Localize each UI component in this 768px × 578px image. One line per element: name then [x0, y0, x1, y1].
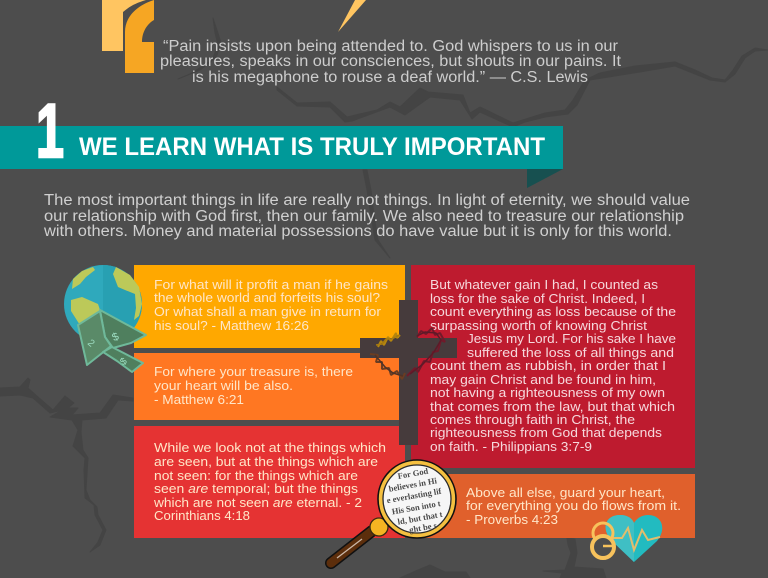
panel: Philippians 3:7-9: But whatever gain I had, I counted as: [430, 277, 659, 292]
icon: lightning bolt: [338, 0, 366, 32]
panel: 2 Corinthians 4:18: are seen, but at the things which are: [154, 454, 378, 469]
panel: Matthew 6:21: - Matthew 6:21: [154, 392, 244, 407]
lens text: believes in Hi: [388, 475, 438, 494]
panel: Philippians 3:7-9: comes through faith in Christ, the: [430, 412, 635, 427]
panel: Philippians 3:7-9: surpassing worth of knowing Christ: [430, 318, 647, 333]
section banner: [0, 89, 563, 188]
icon: globe with money: 2: [85, 338, 97, 350]
quote: pleasures, speaks in our consciences, but shouts in our pains. It: [160, 53, 622, 70]
lens text: ght be s: [408, 520, 438, 535]
panel: Matthew 6:21: For where your treasure is, there: [154, 364, 353, 379]
panel: Matthew 16:26: For what will it profit a man if he gains: [154, 277, 389, 292]
panel: Matthew 16:26: Or what shall a man give in return for: [154, 304, 382, 319]
intro paragraph: [43, 192, 690, 240]
intro paragraph: The most important things in life are really not things. In light of eternity, we should value: [44, 192, 690, 209]
icon: globe with money: $: [110, 331, 121, 344]
panel: 2 Corinthians 4:18: Corinthians 4:18: [154, 508, 250, 523]
panel: 2 Corinthians 4:18: seen are temporal; but the things: [154, 481, 359, 496]
crown of thorns: [370, 328, 445, 379]
panel: Proverbs 4:23: Above all else, guard your heart,: [466, 485, 665, 500]
panel: Matthew 16:26: his soul? - Matthew 16:26: [154, 318, 309, 333]
panel: Proverbs 4:23: for everything you do flows from it.: [466, 498, 681, 513]
icon: cross with crown of thorns: [360, 300, 457, 445]
panel: Philippians 3:7-9: count them as rubbish, in order that I: [430, 358, 666, 373]
icon: globe with money: $: [118, 356, 130, 368]
heading: WE LEARN WHAT IS TRULY IMPORTANT: [79, 133, 545, 161]
panel: Matthew 6:21: your heart will be also.: [154, 378, 293, 393]
intro paragraph: our relationship with God first, then our family. We also need to treasure our relationship: [44, 208, 684, 225]
icon: magnifying glass over Bible verse: [331, 460, 456, 563]
panel: Matthew 16:26: the whole world and forfeits his soul?: [154, 290, 380, 305]
panel: Proverbs 4:23: - Proverbs 4:23: [466, 512, 558, 527]
panel: Philippians 3:7-9: suffered the loss of all things and: [467, 345, 674, 360]
panel: 2 Corinthians 4:18: [134, 426, 405, 538]
icon: heart with lock and pulse: [592, 515, 662, 562]
panel: Philippians 3:7-9: that comes from the law, but that which: [430, 399, 675, 414]
quote: [160, 38, 622, 86]
panel: Matthew 16:26: [134, 265, 405, 348]
panel: Philippians 3:7-9: may gain Christ and be found in him,: [430, 372, 656, 387]
banknote: [103, 347, 143, 372]
panel: Philippians 3:7-9: Jesus my Lord. For his sake I have: [467, 331, 676, 346]
banknote: [78, 311, 111, 365]
icon: globe with money: [64, 265, 146, 372]
panel: Philippians 3:7-9: loss for the sake of Christ. Indeed, I: [430, 291, 645, 306]
lens text: e everlasting lif: [386, 486, 442, 505]
banknote: [100, 310, 146, 348]
panel: 2 Corinthians 4:18: which are not seen are eternal. - 2: [153, 495, 362, 510]
icon: quotation mark: [102, 0, 154, 73]
panel: Philippians 3:7-9: count everything as loss because of the: [430, 304, 676, 319]
lens text: ld, but that t: [397, 509, 443, 527]
quote: “Pain insists upon being attended to. God whispers to us in our: [163, 38, 618, 55]
panel: Proverbs 4:23: [411, 474, 695, 538]
lens text: [382, 464, 448, 538]
panel: 2 Corinthians 4:18: not seen: for the things which are: [154, 468, 358, 483]
panel: Philippians 3:7-9: righteousness from God that depends: [430, 425, 663, 440]
lens text: For God: [397, 466, 429, 481]
panel: Matthew 6:21: [134, 353, 405, 420]
panel: Philippians 3:7-9: not having a righteousness of my own: [430, 385, 665, 400]
intro paragraph: with others. Money and material possessions do have value but it is only for this world.: [43, 223, 672, 240]
panel: Philippians 3:7-9: on faith. - Philippians 3:7-9: [430, 439, 592, 454]
panel: 2 Corinthians 4:18: While we look not at the things which: [154, 440, 386, 455]
section number: 1: [36, 89, 64, 174]
quote: is his megaphone to rouse a deaf world.” — C.S. Lewis: [192, 69, 588, 86]
lens text: His Son into t: [391, 498, 441, 516]
panel: Philippians 3:7-9: [411, 265, 695, 468]
